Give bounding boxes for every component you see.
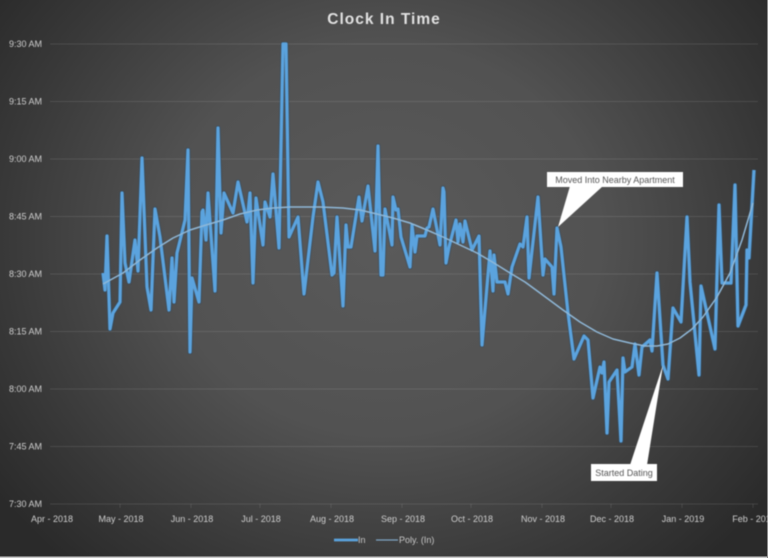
x axis labels: Aug - 2018 bbox=[310, 514, 354, 524]
y axis labels: 7:30 AM bbox=[9, 499, 42, 509]
y axis labels: 9:15 AM bbox=[9, 96, 42, 106]
callout: started dating bbox=[591, 365, 663, 481]
x axis labels: Apr - 2018 bbox=[31, 514, 73, 524]
y axis labels: 9:00 AM bbox=[9, 154, 42, 164]
x axis labels bbox=[31, 514, 768, 524]
y axis labels: 8:30 AM bbox=[9, 269, 42, 279]
legend: Poly. (In) bbox=[399, 535, 434, 545]
series: In bbox=[103, 44, 754, 441]
x axis labels: Jan - 2019 bbox=[662, 514, 704, 524]
x axis labels: Jul - 2018 bbox=[241, 514, 281, 524]
y axis labels: 8:45 AM bbox=[9, 212, 42, 222]
legend: In bbox=[358, 535, 366, 545]
x axis labels: Jun - 2018 bbox=[171, 514, 213, 524]
series: polynomial trend bbox=[103, 203, 753, 346]
y axis labels: 8:15 AM bbox=[9, 326, 42, 336]
title: Clock In Time bbox=[327, 11, 441, 28]
legend bbox=[334, 535, 434, 545]
x axis labels: Nov - 2018 bbox=[521, 514, 565, 524]
callout: moved into nearby apartment: Moved Into Nearby Apartment bbox=[555, 175, 675, 185]
x axis labels: Oct - 2018 bbox=[451, 514, 493, 524]
y axis labels: 9:30 AM bbox=[9, 39, 42, 49]
x axis labels: Dec - 2018 bbox=[590, 514, 634, 524]
y axis labels bbox=[9, 39, 42, 509]
y axis labels: 7:45 AM bbox=[9, 442, 42, 452]
y axis labels: 8:00 AM bbox=[9, 384, 42, 394]
callout: moved into nearby apartment bbox=[547, 172, 683, 227]
x axis labels: May - 2018 bbox=[98, 514, 144, 524]
callout: started dating: Started Dating bbox=[595, 468, 653, 478]
x axis labels: Sep - 2018 bbox=[381, 514, 425, 524]
